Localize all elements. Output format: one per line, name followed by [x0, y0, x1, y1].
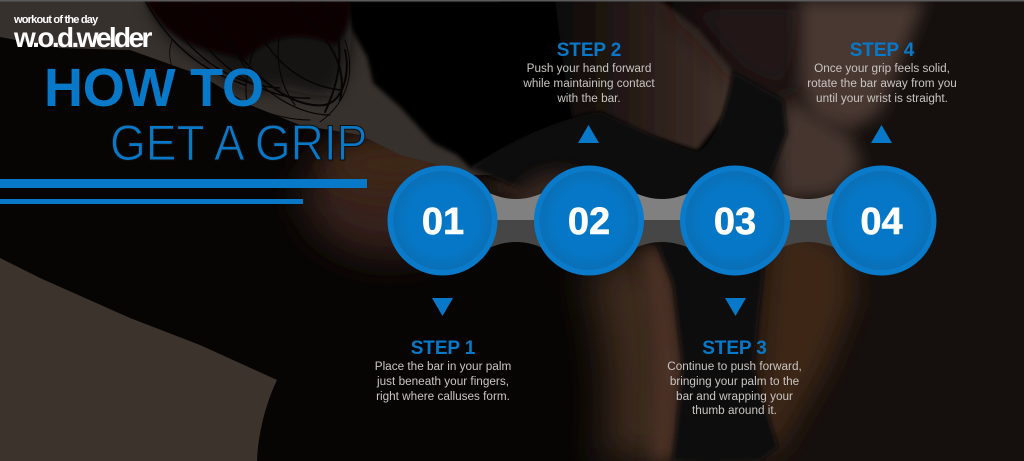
arrow: step 2 up	[578, 125, 599, 143]
step circle 03	[680, 166, 790, 276]
text: step 3: STEP 3	[702, 338, 767, 359]
title: how to get a grip: GET A GRIP	[110, 114, 367, 170]
stepper: connected circles	[388, 166, 936, 276]
text: step 1: Place the bar in your palm	[375, 360, 511, 373]
text: step 1: just beneath your fingers,	[377, 375, 509, 388]
title: how to get a grip	[44, 58, 367, 170]
neck skin	[555, 0, 733, 150]
text: step 1: STEP 1	[411, 338, 475, 359]
text: step 4: until your wrist is straight.	[816, 92, 948, 105]
step circle 02	[534, 166, 644, 276]
text: step 2: Push your hand forward	[527, 62, 651, 75]
black top	[470, 72, 787, 461]
text: step 4: STEP 4	[850, 40, 914, 61]
logo: workout of the day w.o.d.welder: workout of the day	[14, 14, 97, 26]
head shadow	[345, 0, 590, 168]
text: step 2	[523, 40, 655, 105]
text: step 3: bar and wrapping your	[676, 390, 793, 403]
right dark wall	[720, 0, 1024, 461]
text: step 1: right where calluses form.	[376, 390, 510, 403]
text: step 1	[375, 338, 511, 403]
gray wall upper left	[0, 0, 500, 175]
chest skin	[490, 156, 640, 200]
mid back and arm	[660, 0, 810, 100]
text: step 4	[807, 40, 957, 105]
accent bars	[0, 179, 367, 204]
arrow: step 1 down	[432, 298, 453, 316]
text: step 3: bringing your palm to the	[670, 375, 799, 388]
text: step 4: rotate the bar away from you	[807, 77, 957, 90]
step circle 04	[826, 166, 936, 276]
step circle 02: 02	[568, 201, 610, 243]
connector band	[474, 186, 850, 254]
step circle 04: 04	[860, 201, 903, 243]
hair	[145, 0, 352, 122]
text: step 3: thumb around it.	[692, 404, 777, 417]
arrow: step 3 down	[725, 298, 746, 316]
logo: workout of the day w.o.d.welder: w.o.d.welder	[14, 22, 150, 53]
text: step 2: STEP 2	[557, 40, 621, 61]
text: step 4: Once your grip feels solid,	[814, 62, 950, 75]
arrow: step 4 up	[871, 125, 892, 143]
title: how to get a grip: HOW TO	[44, 58, 264, 118]
step circle 01: 01	[422, 201, 464, 243]
text: step 2: with the bar.	[557, 92, 621, 105]
step circle 01	[388, 166, 498, 276]
lit arm	[305, 135, 475, 255]
text: step 3	[667, 338, 802, 417]
step circle 03: 03	[714, 201, 756, 243]
text: step 3: Continue to push forward,	[667, 360, 802, 373]
lower-left wall	[0, 258, 277, 461]
text: step 2: while maintaining contact	[523, 77, 655, 90]
